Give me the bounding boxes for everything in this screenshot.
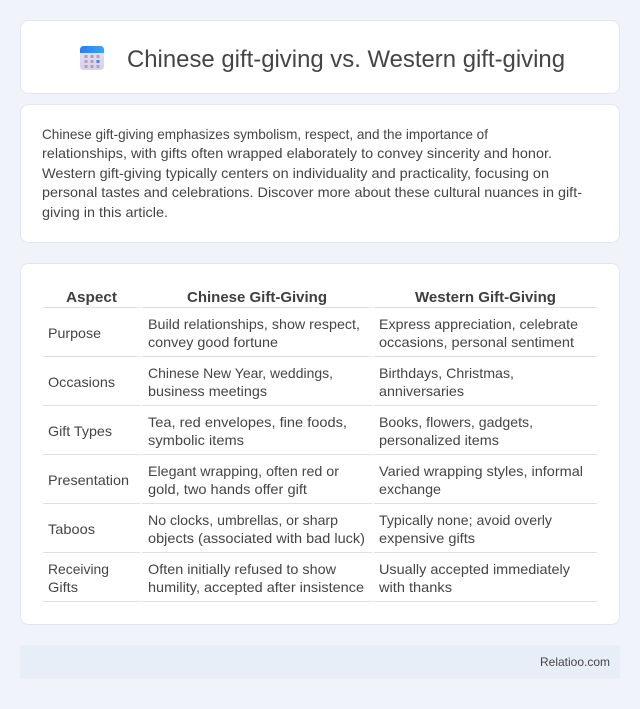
row: Presentation: exchange — [379, 481, 441, 497]
row: Gift Types: symbolic items — [148, 432, 244, 448]
row: Taboos: Typically none; avoid overly — [379, 512, 552, 528]
row: Presentation: Presentation — [48, 472, 129, 488]
panel: title card — [20, 20, 620, 94]
text block: intro paragraph: personal tastes and celebrations. Discover more about these cultural nuances in gift- — [42, 184, 582, 200]
footer credit: Relatioo.com — [540, 655, 610, 669]
row: Gift Types — [48, 414, 533, 448]
row: Presentation: Varied wrapping styles, informal — [379, 463, 583, 479]
text block: intro paragraph: relationships, with gifts often wrapped elaborately to convey sincerity and honor. — [42, 145, 552, 161]
table header: Chinese Gift-Giving — [187, 289, 327, 306]
row: Receiving Gifts: Usually accepted immediately — [379, 561, 570, 577]
row: Presentation — [48, 463, 583, 497]
table header — [66, 289, 556, 306]
row: Purpose: Build relationships, show respect, — [148, 316, 360, 332]
row: Occasions — [48, 365, 514, 399]
row: Occasions: anniversaries — [379, 383, 464, 399]
row: Taboos: expensive gifts — [379, 530, 475, 546]
row: Receiving Gifts: Receiving — [48, 561, 109, 577]
panel: introduction — [20, 104, 620, 242]
row: Occasions: Chinese New Year, weddings, — [148, 365, 333, 381]
table header: Western Gift-Giving — [415, 289, 556, 306]
row: Presentation: gold, two hands offer gift — [148, 481, 307, 497]
row: Gift Types: Tea, red envelopes, fine foods, — [148, 414, 347, 430]
icon: calendar — [80, 46, 104, 70]
row: Purpose: convey good fortune — [148, 334, 278, 350]
row: Purpose — [48, 316, 578, 350]
row: Receiving Gifts: Often initially refused to show — [148, 561, 337, 577]
row: Receiving Gifts — [48, 561, 570, 595]
row: Occasions: Occasions — [48, 374, 115, 390]
row: Receiving Gifts: with thanks — [378, 579, 452, 595]
row: Gift Types: Gift Types — [48, 423, 112, 439]
row: Presentation: Elegant wrapping, often red or — [148, 463, 339, 479]
row: Occasions: business meetings — [148, 383, 267, 399]
row: Taboos — [48, 512, 552, 546]
panel: comparison table — [20, 264, 620, 624]
row: Gift Types: personalized items — [379, 432, 499, 448]
row: Taboos: No clocks, umbrellas, or sharp — [148, 512, 338, 528]
row: Taboos: objects (associated with bad luck) — [148, 530, 365, 546]
text block: intro paragraph: giving in this article. — [42, 204, 168, 220]
row: Receiving Gifts: humility, accepted after insistence — [148, 579, 364, 595]
row: Purpose: Purpose — [48, 325, 101, 341]
text block: intro paragraph: Chinese gift-giving emphasizes symbolism, respect, and the importance of — [42, 126, 488, 142]
row: Gift Types: Books, flowers, gadgets, — [379, 414, 533, 430]
row: Receiving Gifts: Gifts — [48, 579, 78, 595]
footer — [20, 645, 620, 679]
table header: Aspect — [66, 289, 117, 306]
text block: intro paragraph: Western gift-giving typically centers on individuality and practicality, focusing on — [42, 165, 549, 181]
row: Purpose: occasions, personal sentiment — [379, 334, 574, 350]
title: Chinese gift-giving vs. Western gift-giving — [127, 46, 565, 73]
row: Taboos: Taboos — [48, 521, 95, 537]
text block: intro paragraph — [42, 126, 582, 220]
row: Purpose: Express appreciation, celebrate — [379, 316, 578, 332]
row: Occasions: Birthdays, Christmas, — [379, 365, 514, 381]
